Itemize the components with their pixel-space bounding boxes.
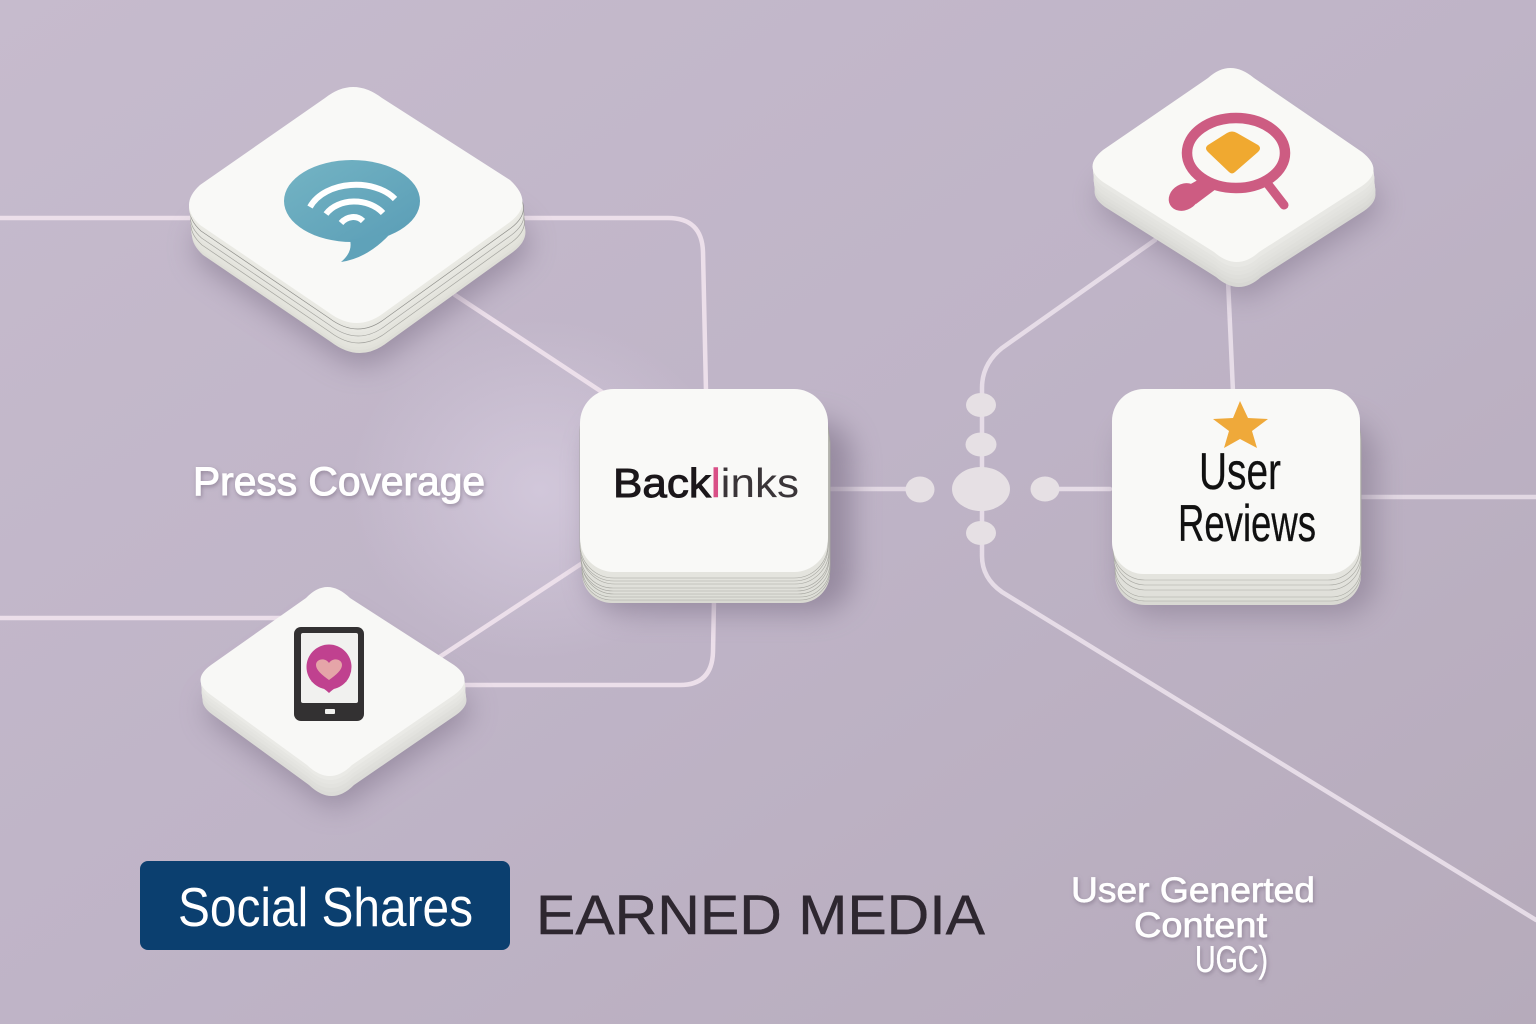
label box: Social Shares: Social Shares xyxy=(178,876,473,938)
label box: Social Shares xyxy=(140,861,510,950)
icon: star xyxy=(1213,401,1268,448)
icon: phone with heart xyxy=(294,627,364,721)
panel: search tile xyxy=(1092,68,1380,296)
panel: press coverage tile xyxy=(189,87,528,365)
label: User Generated Content: Content xyxy=(1134,906,1267,945)
panel: user reviews tile xyxy=(1112,389,1376,615)
connector lines xyxy=(0,218,1536,920)
title: Earned Media: EARNED MEDIA xyxy=(536,883,986,946)
label: User Generated Content: UGC) xyxy=(1195,939,1268,980)
label: User Generated Content xyxy=(1071,871,1315,980)
label: User: User xyxy=(1199,443,1281,501)
panel: social shares tile xyxy=(200,587,470,806)
connector nodes xyxy=(906,393,1060,545)
icon: speech bubble with signal waves xyxy=(284,160,420,262)
label: Backlinks: Backlinks xyxy=(613,460,799,506)
label: Reviews: Reviews xyxy=(1178,495,1316,553)
label: Press Coverage: Press Coverage xyxy=(193,460,485,504)
panel: backlinks tile xyxy=(580,389,852,612)
label: User Generated Content: User Generted xyxy=(1071,871,1315,910)
icon: magnifying glass xyxy=(1164,118,1285,216)
